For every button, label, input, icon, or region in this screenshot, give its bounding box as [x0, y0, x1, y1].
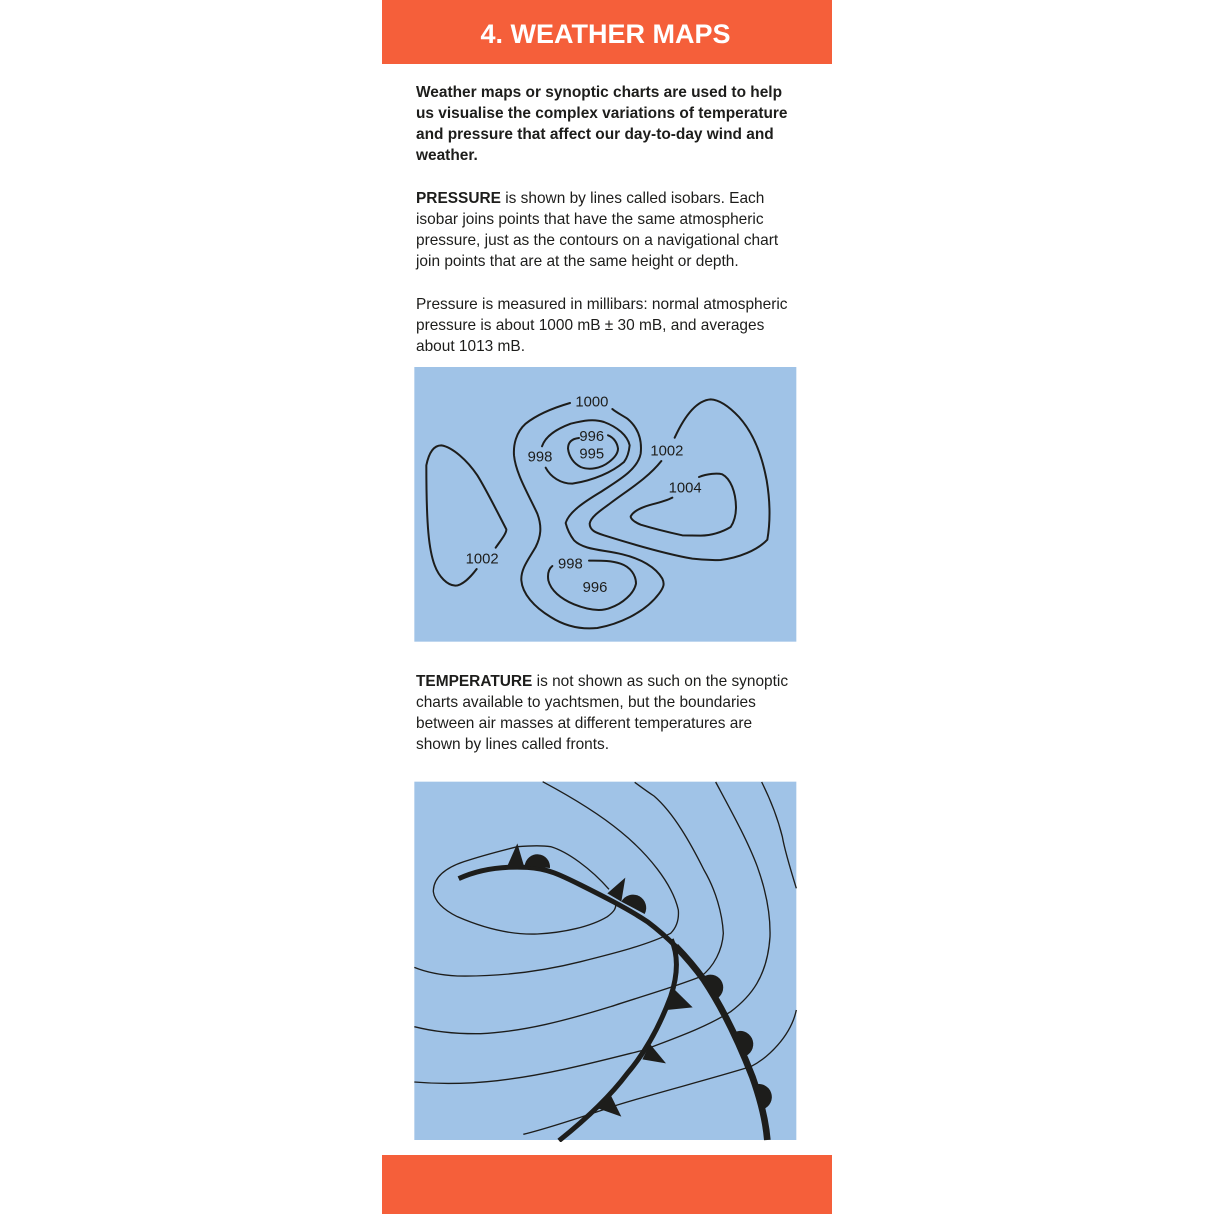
isobar labels: 1000: [575, 394, 608, 410]
isobar labels: 1002: [650, 444, 683, 460]
title: 4. WEATHER MAPS: [480, 19, 730, 49]
isobar labels: 996: [583, 580, 607, 596]
isobar labels: 1004: [669, 481, 702, 497]
isobar labels: [466, 394, 702, 596]
pressure text: [416, 190, 778, 270]
temperature text: between air masses at different temperatures are: [416, 715, 752, 732]
pressure text: pressure, just as the contours on a navigational chart: [416, 232, 778, 249]
pressure text: PRESSURE is shown by lines called isobars. Each: [416, 190, 764, 206]
intro text: Weather maps or synoptic charts are used to help: [416, 84, 782, 100]
isobar labels: 996: [579, 429, 604, 445]
intro text: and pressure that affect our day-to-day wind and: [416, 126, 774, 143]
pressure text: isobar joins points that have the same atmospheric: [416, 211, 764, 228]
isobar labels: 998: [528, 449, 552, 465]
header banner: [382, 0, 832, 64]
isobar labels: 998: [558, 556, 583, 572]
intro text: us visualise the complex variations of temperature: [416, 105, 788, 122]
footer banner: [382, 1155, 832, 1214]
pressure text: join points that are at the same height or depth.: [416, 253, 739, 270]
temperature text: charts available to yachtsmen, but the boundaries: [416, 694, 756, 711]
isobar labels: 995: [579, 447, 604, 463]
millibars text: about 1013 mB.: [416, 338, 525, 355]
millibars text: pressure is about 1000 mB ± 30 mB, and averages: [416, 317, 764, 334]
temperature text: [416, 672, 788, 753]
millibars text: [416, 296, 788, 355]
chart: fronts map: [414, 781, 797, 1142]
chart: isobar map: [414, 367, 796, 642]
cold front: [507, 843, 693, 1141]
temperature text: TEMPERATURE is not shown as such on the synoptic: [416, 672, 788, 690]
temperature text: shown by lines called fronts.: [416, 736, 609, 753]
intro text: weather.: [416, 147, 478, 164]
millibars text: Pressure is measured in millibars: normal atmospheric: [416, 296, 788, 312]
isobars: [414, 782, 796, 1134]
intro text: [416, 84, 788, 164]
warm front: [459, 854, 772, 1140]
isobar labels: 1002: [466, 552, 499, 568]
